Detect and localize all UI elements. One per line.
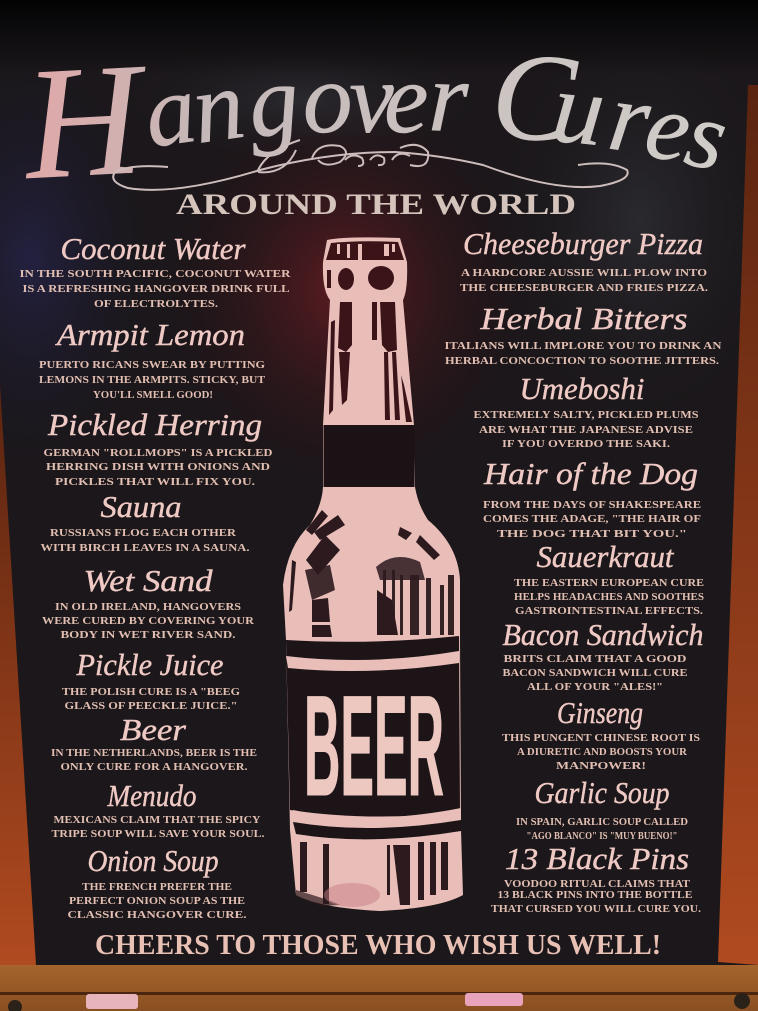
left column cures: PICKLES THAT WILL FIX YOU. [55,476,255,488]
title: g [243,43,304,159]
right column cures: HERBAL CONCOCTION TO SOOTHE JITTERS. [445,355,719,367]
right column cures: Cheeseburger Pizza [463,226,703,261]
right column cures: ARE WHAT THE JAPANESE ADVISE [479,424,693,436]
left column cures: Beer [120,712,187,747]
left column cures: GERMAN "ROLLMOPS" IS A PICKLED [44,447,273,459]
subtitle: AROUND THE WORLD [176,188,576,221]
left column cures: THE FRENCH PREFER THE [82,881,232,893]
right column cures: BRITS CLAIM THAT A GOOD [504,653,687,665]
right column cures: BACON SANDWICH WILL CURE [502,667,688,679]
text: BEER [304,667,444,826]
left column cures: MEXICANS CLAIM THAT THE SPICY [54,814,261,826]
left column cures: LEMONS IN THE ARMPITS. STICKY, BUT [39,374,266,386]
right column cures: Umeboshi [520,371,644,406]
left column cures: CLASSIC HANGOVER CURE. [68,909,247,921]
wood frame: bottom [0,965,758,1011]
lower glass tint [324,883,380,907]
title: C [489,27,581,169]
lower dark band [293,820,461,839]
wood frame: left [0,385,36,965]
right column cures: THAT CURSED YOU WILL CURE YOU. [491,903,701,915]
right column cures: GASTROINTESTINAL EFFECTS. [515,605,703,617]
title: s [678,79,736,191]
left column cures: ONLY CURE FOR A HANGOVER. [60,761,248,773]
left column cures: Sauna [100,489,182,524]
left column cures: BODY IN WET RIVER SAND. [60,629,236,641]
bottle cap inside [326,241,404,260]
board lighting [0,0,758,500]
title: r [427,41,495,153]
right column cures: FROM THE DAYS OF SHAKESPEARE [483,499,701,511]
left column cures [20,231,292,921]
right column cures: Ginseng [557,695,643,730]
left column cures: Coconut Water [60,231,246,266]
left column cures: Menudo [107,778,196,813]
neck shading [324,266,414,487]
right column cures: THE DOG THAT BIT YOU." [497,528,687,540]
left column cures: WITH BIRCH LEAVES IN A SAUNA. [40,542,250,554]
right column cures: THE CHEESEBURGER AND FRIES PIZZA. [460,282,708,294]
left column cures: THE POLISH CURE IS A "BEEG [62,686,240,698]
left column cures: HERRING DISH WITH ONIONS AND [46,461,270,473]
right column cures: IF YOU OVERDO THE SAKI. [502,438,670,450]
left column cures: RUSSIANS FLOG EACH OTHER [50,527,237,539]
title flourish [113,140,628,190]
right column cures: Garlic Soup [534,775,670,810]
title: u [548,50,610,168]
title: r [603,60,658,175]
left column cures: PUERTO RICANS SWEAR BY PUTTING [39,359,265,371]
label stripes [286,651,461,827]
right column cures: HELPS HEADACHES AND SOOTHES [514,591,704,603]
left column cures: IN THE SOUTH PACIFIC, COCONUT WATER [20,268,292,280]
right column cures [444,226,722,915]
right column cures: COMES THE ADAGE, "THE HAIR OF [483,513,701,525]
title: e [638,70,699,183]
right column cures: A DIURETIC AND BOOSTS YOUR [517,746,688,758]
right column cures: ALL OF YOUR "ALES!" [527,681,663,693]
right column cures: EXTREMELY SALTY, PICKLED PLUMS [474,409,698,421]
left column cures: Wet Sand [84,563,213,598]
left column cures: YOU'LL SMELL GOOD! [93,389,213,401]
wood frame: right [718,85,758,965]
shoulder and glass shading [289,510,454,637]
left column cures: Pickle Juice [76,647,224,682]
right column cures: VOODOO RITUAL CLAIMS THAT [504,878,691,890]
right column cures: THE EASTERN EUROPEAN CURE [514,577,704,589]
bottle illustration [283,237,463,911]
left column cures: TRIPE SOUP WILL SAVE YOUR SOUL. [52,828,265,840]
bottle silhouette [283,237,463,911]
right column cures: Herbal Bitters [479,301,688,336]
right column cures: Sauerkraut [536,539,675,574]
title: v [348,42,395,154]
label panel [286,636,460,817]
left column cures: IN THE NETHERLANDS, BEER IS THE [51,747,257,759]
title: o [299,42,355,155]
left column cures: WERE CURED BY COVERING YOUR [42,615,255,627]
left column cures: Armpit Lemon [55,317,245,352]
left column cures: GLASS OF PEECKLE JUICE." [64,700,238,712]
title: e [384,43,428,154]
left column cures: Onion Soup [88,843,218,878]
left column cures: Pickled Herring [47,407,262,442]
right column cures: IN SPAIN, GARLIC SOUP CALLED [516,816,688,828]
title: n [186,48,251,165]
title: a [138,52,203,169]
lower glass shading [296,842,448,906]
footer slogan: CHEERS TO THOSE WHO WISH US WELL! [95,929,661,961]
right column cures: ITALIANS WILL IMPLORE YOU TO DRINK AN [444,340,722,352]
right column cures: Bacon Sandwich [502,617,704,652]
cap highlights [337,244,395,260]
right column cures: A HARDCORE AUSSIE WILL PLOW INTO [461,267,708,279]
right column cures: Hair of the Dog [483,456,698,491]
right column cures: MANPOWER! [556,760,646,772]
left column cures: OF ELECTROLYTES. [94,298,218,310]
left column cures: PERFECT ONION SOUP AS THE [69,895,245,907]
left column cures: IN OLD IRELAND, HANGOVERS [55,601,241,613]
right column cures: 13 BLACK PINS INTO THE BOTTLE [498,889,692,901]
left column cures: IS A REFRESHING HANGOVER DRINK FULL [22,283,290,295]
right column cures: "AGO BLANCO" IS "MUY BUENO!" [526,830,678,842]
right column cures: THIS PUNGENT CHINESE ROOT IS [502,732,700,744]
title: H [19,29,153,213]
right column cures: 13 Black Pins [505,841,689,876]
